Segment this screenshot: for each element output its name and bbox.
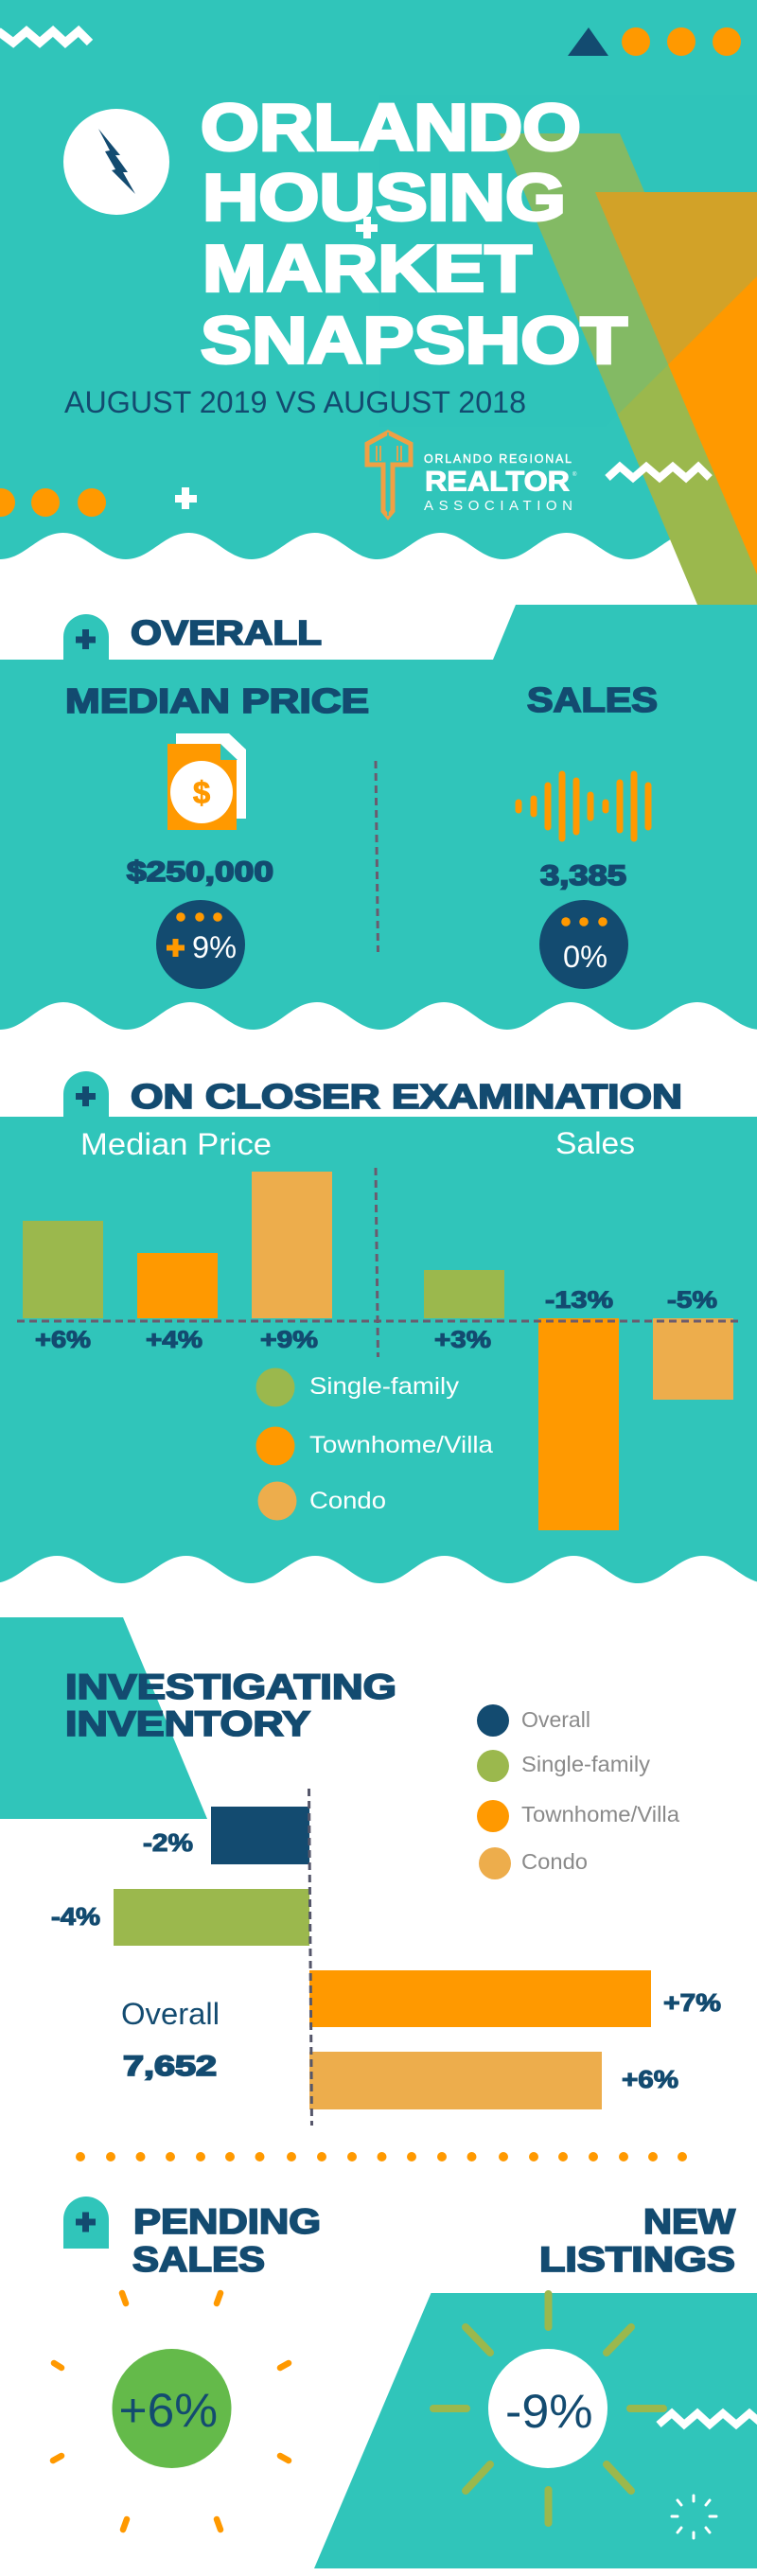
legend: inventory: Townhome/Villa (521, 1802, 679, 1826)
badge: plus 6 percent (112, 2349, 231, 2468)
badge: plus 9 percent (156, 900, 245, 989)
value: overall inventory: 7,652 (123, 2051, 217, 2082)
bar chart: inventory (51, 1789, 721, 2126)
logo: Orlando Regional Realtor Association: ® (572, 471, 577, 478)
bar chart: inventory: +7% (663, 1988, 721, 2017)
icon: sun rays orange (53, 2293, 289, 2530)
logo: Orlando Regional Realtor Association: REALTOR (425, 466, 570, 498)
bar chart: median price and sales: +3% (434, 1327, 491, 1353)
panel: on closer examination (0, 1071, 757, 1599)
heading: sales: SALES (527, 680, 658, 719)
heading: pending sales: SALES (132, 2240, 265, 2279)
legend: inventory: Overall (521, 1707, 590, 1732)
legend: inventory: Condo (521, 1849, 588, 1874)
legend: property types: Condo (309, 1488, 386, 1514)
icon: white plus (175, 487, 197, 509)
subheading: sales: Sales (555, 1126, 635, 1160)
heading: pending sales: PENDING (133, 2202, 321, 2241)
badge: 0 percent: 0% (563, 940, 607, 974)
divider (376, 761, 378, 952)
title: ORLANDO (201, 91, 581, 165)
heading: on closer examination: ON CLOSER EXAMINATION (131, 1077, 682, 1116)
icon: tab with plus (63, 614, 109, 660)
legend: property types: Townhome/Villa (309, 1432, 493, 1458)
icon: price document (167, 733, 246, 830)
icon: tab with plus (63, 1071, 109, 1117)
value: sales: 3,385 (540, 860, 626, 891)
legend: inventory: Single-family (521, 1752, 651, 1776)
icon: price document: $ (193, 775, 210, 810)
wave divider (0, 1002, 757, 1041)
subtitle: AUGUST 2019 VS AUGUST 2018 (64, 385, 526, 419)
heading: pending sales (132, 2202, 321, 2279)
title (201, 91, 627, 377)
icon: plus in title (356, 217, 378, 238)
bar chart: inventory: +6% (622, 2065, 678, 2093)
panel: investigating inventory (0, 1617, 721, 2126)
heading: investigating inventory: INVESTIGATING (65, 1667, 396, 1706)
icon: sound wave (519, 774, 648, 838)
logo: Orlando Regional Realtor Association: ORLANDO REGIONAL (424, 452, 572, 466)
wave divider (0, 1556, 757, 1599)
icon: tab with plus (63, 2197, 109, 2249)
label: overall: Overall (121, 1997, 220, 2031)
zigzag: right of logo (607, 467, 710, 478)
heading: overall: OVERALL (131, 613, 322, 652)
heading: median price: MEDIAN PRICE (65, 681, 369, 720)
logo: Orlando Regional Realtor Association: ASSOCIATION (424, 498, 572, 514)
bar chart: median price and sales: -13% (545, 1287, 613, 1314)
panel: new listings (314, 2202, 757, 2568)
icon: small white burst (672, 2496, 716, 2538)
bar chart: median price and sales: +4% (146, 1327, 202, 1353)
badge: 0 percent (539, 900, 628, 989)
bar chart: median price and sales (17, 1168, 741, 1530)
panel: overall (0, 605, 757, 1041)
panel: header (0, 0, 757, 610)
heading: investigating inventory: INVENTORY (65, 1704, 310, 1743)
title: HOUSING (202, 161, 566, 235)
dotted divider (76, 2152, 687, 2161)
heading: new listings: LISTINGS (539, 2240, 735, 2279)
icon: lightning bolt in circle (63, 109, 169, 215)
panel: pending sales (53, 2197, 321, 2530)
orange dots: bottom left (0, 488, 106, 517)
bar chart: median price and sales: -5% (667, 1287, 717, 1314)
icon: sun rays green (433, 2294, 663, 2523)
heading: new listings: NEW (643, 2202, 735, 2241)
bar chart: inventory: -2% (143, 1828, 193, 1857)
logo: Orlando Regional Realtor Association (367, 432, 577, 517)
zigzag: top left (0, 31, 90, 43)
title: MARKET (202, 231, 532, 305)
badge: plus 6 percent: +6% (119, 2384, 218, 2437)
heading: new listings (539, 2202, 735, 2279)
badge: minus 9 percent (488, 2349, 607, 2468)
subheading: median price: Median Price (80, 1127, 272, 1161)
orange dots: top right (622, 27, 741, 56)
title: SNAPSHOT (201, 303, 627, 377)
badge: plus 9 percent: 9% (192, 930, 237, 964)
bar chart: median price and sales: +9% (260, 1327, 318, 1353)
bar chart: inventory: -4% (51, 1902, 100, 1931)
value: median price: $250,000 (127, 856, 273, 888)
green and orange angled shapes (378, 95, 757, 605)
badge: minus 9 percent: -9% (505, 2385, 592, 2438)
legend: property types (255, 1368, 493, 1520)
icon: triangle (568, 27, 608, 56)
legend: inventory (477, 1704, 679, 1879)
zigzag: bottom right (659, 2413, 757, 2425)
bar chart: median price and sales: +6% (35, 1327, 91, 1353)
heading: investigating inventory (65, 1667, 396, 1743)
legend: property types: Single-family (309, 1373, 460, 1400)
